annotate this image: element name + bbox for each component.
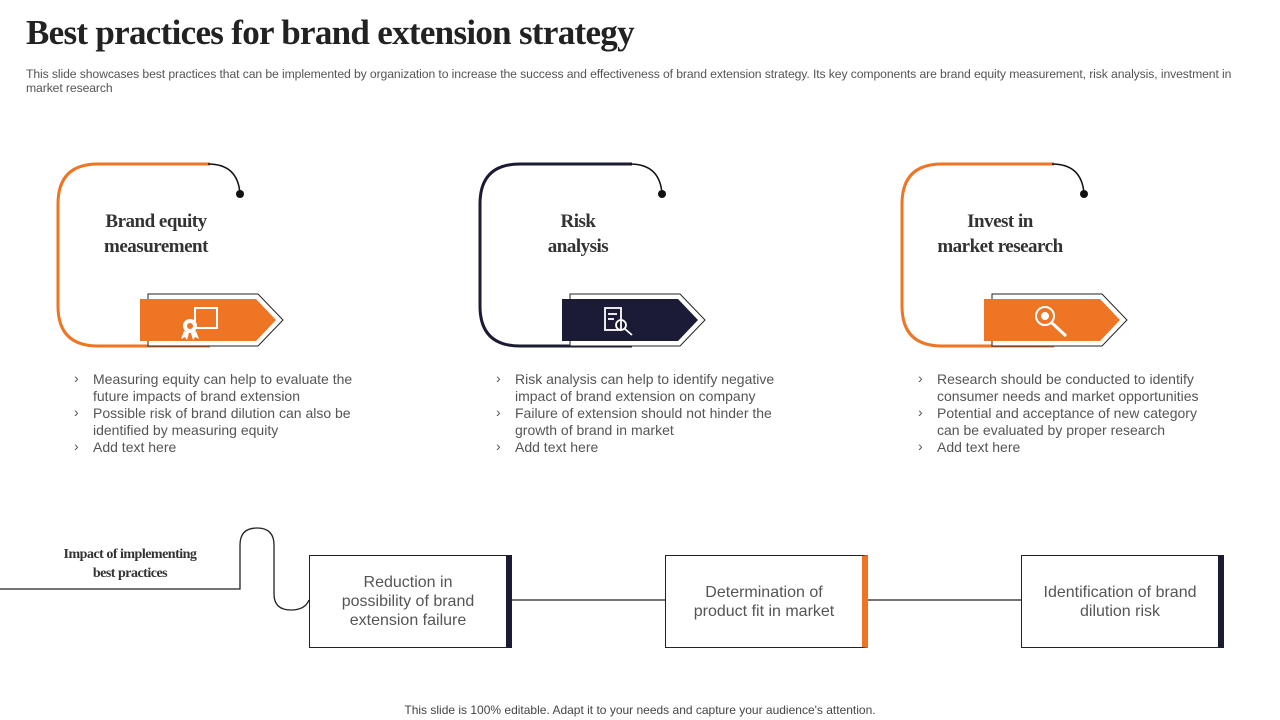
box 3 <box>1021 555 1224 648</box>
subtitle: This slide showcases best practices that can be implemented by organization to increase the success and effectiveness of brand extension strategy. Its key components are brand equity measurement, risk analysis, investment in <box>26 67 1231 81</box>
box 1: Reduction in <box>364 574 452 591</box>
subtitle: market research <box>26 81 113 95</box>
bullets 3: Research should be conducted to identify consumer needs and market opportunities <box>937 371 1198 404</box>
card 3 frame <box>902 164 1127 346</box>
box 1 <box>309 555 512 648</box>
bullets 2: Risk analysis can help to identify negative impact of brand extension on company <box>515 371 774 404</box>
bullets 2 <box>496 371 774 455</box>
title: Best practices for brand extension strategy <box>26 13 634 52</box>
box 3: dilution risk <box>1080 602 1160 620</box>
bullets 3: Potential and acceptance of new category can be evaluated by proper research <box>937 405 1197 438</box>
bullets 1: Add text here <box>93 439 176 455</box>
bullets 3 <box>918 371 1198 455</box>
box 1: possibility of brand <box>342 593 474 610</box>
icon: magnifier bug <box>1036 307 1066 336</box>
bullets 3: Add text here <box>937 439 1020 455</box>
box 3: Identification of brand <box>1044 584 1196 600</box>
icon: award box <box>181 308 217 340</box>
card 1 frame <box>58 164 283 346</box>
connector line <box>0 528 1021 610</box>
bullets 2: Add text here <box>515 439 598 455</box>
impact label: best practices <box>93 566 167 581</box>
subtitle <box>26 67 1231 95</box>
icon: clipboard magnifier <box>605 308 632 335</box>
heading 2: Risk <box>561 211 595 232</box>
bullets 1: Possible risk of brand dilution can also be identified by measuring equity <box>93 405 351 438</box>
heading 3 <box>937 211 1063 257</box>
impact label <box>64 547 197 581</box>
footer: This slide is 100% editable. Adapt it to your needs and capture your audience's attention. <box>404 703 876 717</box>
heading 2: analysis <box>548 236 608 257</box>
bullets 1: Measuring equity can help to evaluate the future impacts of brand extension <box>93 371 352 404</box>
heading 1: Brand equity <box>105 211 207 232</box>
heading 1 <box>104 211 208 257</box>
box 2 <box>665 555 868 648</box>
card 2 frame <box>480 164 705 346</box>
heading 3: market research <box>937 236 1063 257</box>
bullets 2: Failure of extension should not hinder the growth of brand in market <box>515 405 772 438</box>
bullets 1 <box>74 371 352 455</box>
impact label: Impact of implementing <box>64 547 196 562</box>
heading 3: Invest in <box>967 211 1033 232</box>
box 1: extension failure <box>350 612 466 629</box>
heading 1: measurement <box>104 236 208 257</box>
box 2: Determination of <box>705 584 823 600</box>
box 2: product fit in market <box>694 602 834 620</box>
heading 2 <box>548 211 608 257</box>
